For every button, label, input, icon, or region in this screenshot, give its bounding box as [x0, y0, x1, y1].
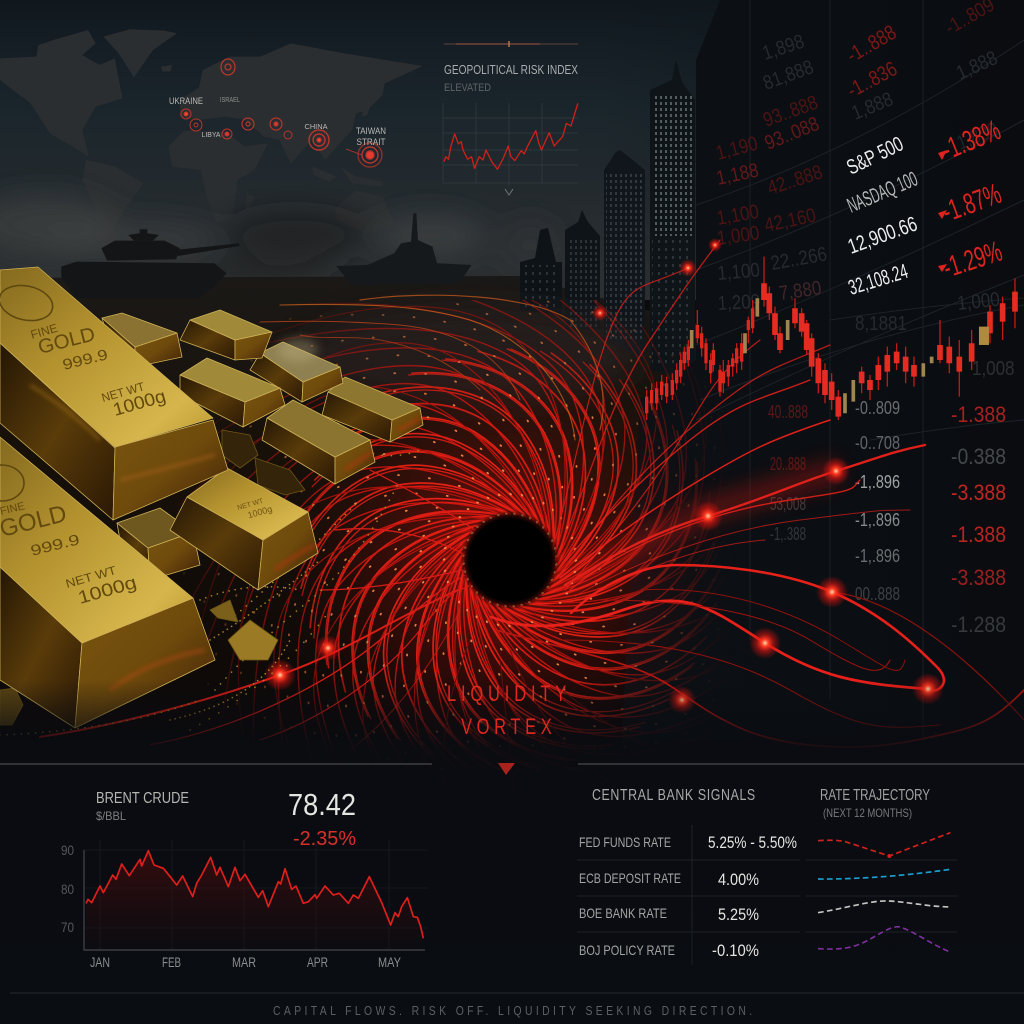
ghost ticker numbers: -1,.896 [855, 546, 900, 566]
gold bar: back right [322, 377, 423, 442]
change: -1.29% [938, 236, 1006, 285]
axis labels: months: APR [307, 955, 328, 970]
ghost ticker numbers: 1,209 [717, 289, 761, 314]
engraving: mid bar [237, 496, 273, 522]
hotspot: South Asia [284, 131, 292, 139]
ghost ticker numbers: 1,188 [714, 158, 760, 189]
ghost ticker numbers: 1,000 [715, 221, 761, 249]
black hole [460, 510, 560, 610]
hotspot: north Africa [222, 129, 232, 139]
gold reflections [30, 385, 420, 690]
label: Nasdaq 100: NASDAQ 100 [844, 168, 921, 218]
ghost ticker numbers: 1,898 [759, 29, 807, 64]
node [679, 259, 697, 277]
unit label: $/BBL [96, 809, 126, 823]
title: liquidity vortex [447, 682, 566, 740]
label: China: CHINA [304, 124, 328, 131]
ghost ticker numbers: 93..088 [761, 112, 822, 154]
engraving: lower bar: 999.9 [29, 531, 81, 560]
engraving: upper bar [29, 321, 168, 420]
axis labels: months: FEB [162, 955, 181, 970]
title: liquidity vortex: VORTEX [461, 715, 552, 740]
ground and floor [0, 276, 720, 770]
ghost ticker numbers: -1..888 [843, 21, 901, 68]
change: -1.38% [938, 114, 1005, 166]
line chart: risk index [444, 103, 578, 169]
ghost ticker numbers: 7,880 [777, 276, 823, 304]
node [822, 457, 850, 485]
ghost ticker numbers: -1,.896 [855, 510, 900, 530]
candlestick chart [647, 257, 1015, 420]
row: boe bank rate: BOE BANK RATE [579, 905, 667, 921]
ghost ticker numbers: -0..809 [855, 398, 900, 418]
axis labels: price: 70 [61, 919, 74, 935]
label: 12,900.66: 12,900.66 [845, 212, 920, 259]
ghost ticker numbers: 00..888 [855, 584, 900, 604]
engraving: mid bar: 1000g [247, 504, 273, 520]
label: elevated: ELEVATED [444, 82, 491, 94]
trajectory: ecb [818, 869, 950, 879]
row: ecb deposit rate [579, 870, 759, 889]
ghost ticker numbers: 22..266 [769, 242, 829, 274]
node [912, 673, 944, 705]
map hotspots [181, 59, 382, 167]
row: boe bank rate: 5.25% [718, 906, 759, 924]
trajectory: fed [818, 833, 950, 858]
engraving: upper bar: FINE [29, 321, 59, 342]
axis labels: price [61, 842, 74, 935]
ghost ticker numbers: -1,.896 [855, 472, 900, 492]
hotspot: Middle East [242, 118, 254, 130]
axis labels: months: MAR [232, 955, 256, 970]
arrow: down [498, 763, 515, 775]
ghost ticker numbers: -1.388 [951, 522, 1006, 547]
heading: rate trajectory: RATE TRAJECTORY [820, 787, 930, 804]
row: boj policy rate: BOJ POLICY RATE [579, 942, 675, 958]
area chart: brent price [86, 851, 423, 949]
clouds [0, 195, 560, 282]
ghost ticker numbers: 1,888 [953, 46, 1001, 84]
node [668, 686, 696, 714]
gold bar: top center [180, 310, 272, 360]
ghost ticker numbers: -1.388 [951, 402, 1006, 427]
gold bar: large upper [0, 267, 228, 520]
ghost ticker numbers: 1,190 [713, 131, 760, 164]
hotspot: northern Europe [221, 59, 235, 75]
ghost ticker numbers: -1.288 [951, 612, 1006, 637]
ghost ticker numbers: 1,888 [848, 87, 896, 124]
tank silhouette [61, 229, 239, 298]
ghost ticker numbers: -0..708 [855, 433, 900, 453]
ghost ticker numbers: 53,008 [770, 494, 806, 514]
upper-right fan streams [260, 240, 925, 600]
gold bar: smoky [250, 338, 343, 402]
trajectory: boe [818, 901, 950, 913]
subheading: next 12 months: (NEXT 12 MONTHS) [823, 806, 912, 820]
liquidity vortex [39, 239, 1024, 770]
label: 32,108.24: 32,108.24 [846, 260, 911, 300]
ghost ticker numbers: -1..836 [844, 58, 901, 103]
label: Taiwan: TAIWAN [356, 126, 386, 136]
city skyline [520, 60, 695, 380]
row: boj policy rate: -0.10% [712, 942, 759, 960]
engraving: lower bar [0, 500, 139, 608]
engraving: lower bar: NET WT [64, 563, 119, 591]
label: Israel: ISRAEL [220, 97, 240, 104]
ghost ticker numbers: -1,.388 [770, 524, 806, 544]
ghost ticker numbers: 1,830 [953, 117, 1001, 154]
row: fed funds rate: 5.25% - 5.50% [708, 834, 797, 852]
index labels [843, 133, 921, 300]
footer divider [10, 992, 1024, 994]
panel: brent crude [61, 787, 428, 970]
water swirl sheen [300, 305, 640, 405]
ghost ticker numbers: -3.388 [951, 565, 1006, 590]
axis labels: months: JAN [90, 955, 110, 970]
chart axes [84, 850, 425, 950]
engraving: upper bar: 999.9 [61, 346, 110, 374]
gold specks [0, 420, 420, 735]
node [315, 635, 341, 661]
heading: brent crude: BRENT CRUDE [96, 790, 189, 807]
lower-right loop streams [444, 565, 1024, 800]
rate trajectories [818, 833, 950, 952]
row: boj policy rate [579, 942, 759, 960]
bottom divider [0, 763, 1024, 775]
hotspot: Iran [270, 118, 282, 130]
gold bar: lower center [262, 400, 375, 484]
spiral arms [177, 300, 724, 769]
node [749, 627, 781, 659]
axis labels: months: MAY [378, 955, 401, 970]
row: fed funds rate: FED FUNDS RATE [579, 834, 671, 850]
ghost ticker numbers: 1,100 [716, 258, 761, 284]
ghost ticker numbers: 1,008 [972, 357, 1015, 379]
gold bar: center [180, 358, 285, 427]
gold bar: upper left small [102, 313, 182, 368]
ghost ticker numbers: 1,100 [715, 200, 761, 229]
node [708, 238, 722, 252]
index changes [938, 114, 1006, 285]
gold bar: small mid [117, 508, 200, 580]
building: middle tower [565, 210, 600, 330]
node [592, 305, 608, 321]
seal: upper bar [0, 281, 56, 325]
row: ecb deposit rate: ECB DEPOSIT RATE [579, 870, 681, 886]
ghost ticker numbers: 20..888 [770, 454, 806, 474]
label: Ukraine: UKRAINE [169, 96, 203, 106]
ghost ticker numbers: 40..888 [768, 402, 808, 422]
footer tagline: CAPITAL FLOWS. RISK OFF. LIQUIDITY SEEKING DIRECTION. [273, 1004, 752, 1018]
ghost ticker numbers: 1,000 [956, 287, 1001, 314]
panel: central bank signals [577, 786, 957, 965]
engraving: upper bar: 1000g [111, 386, 168, 420]
bottom fade [0, 680, 1024, 1024]
axis labels: months [90, 955, 401, 970]
row: ecb deposit rate: 4.00% [718, 871, 759, 889]
panel: geopolitical risk index [443, 41, 579, 195]
ghost ticker numbers: -3.388 [951, 480, 1006, 505]
ghost ticker numbers: 8,1881 [855, 312, 907, 334]
label: Libya: LIBYA [202, 132, 221, 139]
lower-left streams [40, 470, 475, 750]
trajectory: boj [818, 927, 950, 952]
world map [0, 29, 423, 240]
gold bar: large lower [0, 437, 215, 728]
building: far skyscraper [520, 228, 562, 315]
gold rubble [0, 430, 305, 725]
map labels [169, 96, 386, 147]
title: liquidity vortex: LIQUIDITY [447, 682, 566, 707]
heading: central bank signals: CENTRAL BANK SIGNALS [592, 786, 755, 803]
ghost ticker numbers: 93..888 [760, 90, 821, 131]
hotspot: Taiwan Strait [346, 143, 382, 167]
row: fed funds rate [579, 834, 797, 852]
building: tall tower [604, 150, 645, 360]
ghost ticker numbers [713, 0, 1015, 637]
change: -1.87% [938, 178, 1006, 229]
hotspot: west Mediterranean [190, 119, 202, 131]
ghost ticker numbers: 81,888 [760, 55, 816, 94]
ghost ticker numbers: -0.388 [951, 444, 1006, 469]
row: boe bank rate [579, 905, 759, 924]
ghost ticker numbers: 42..888 [764, 160, 825, 199]
heading: geopolitical risk index: GEOPOLITICAL RISK INDEX [444, 63, 579, 77]
node [693, 501, 723, 531]
gold bars [0, 267, 423, 728]
hotspot: Ukraine [181, 109, 191, 119]
warship silhouette [336, 213, 471, 285]
label: S&P 500: S&P 500 [843, 133, 907, 179]
node [264, 659, 296, 691]
vortex glow [280, 340, 720, 780]
fan glow [555, 470, 840, 590]
engraving: upper bar: GOLD [36, 323, 97, 359]
gold bar: mid 1000g [170, 468, 318, 590]
brent change: -2.35% [293, 828, 356, 850]
engraving: mid bar: NET WT [237, 498, 265, 512]
market wall [620, 0, 1024, 770]
seal: lower bar [0, 465, 24, 501]
engraving: lower bar: 1000g [76, 572, 139, 608]
axis labels: price: 90 [61, 842, 74, 858]
brent price: 78.42 [288, 787, 356, 822]
label: Strait: STRAIT [356, 137, 386, 147]
axis labels: price: 80 [61, 881, 74, 897]
building: main lit tower [650, 60, 695, 380]
ghost ticker numbers: 42,160 [762, 203, 818, 236]
glowing flow nodes [264, 238, 944, 714]
node [816, 576, 848, 608]
engraving: upper bar: NET WT [100, 379, 147, 405]
hotspot: China [309, 130, 329, 150]
